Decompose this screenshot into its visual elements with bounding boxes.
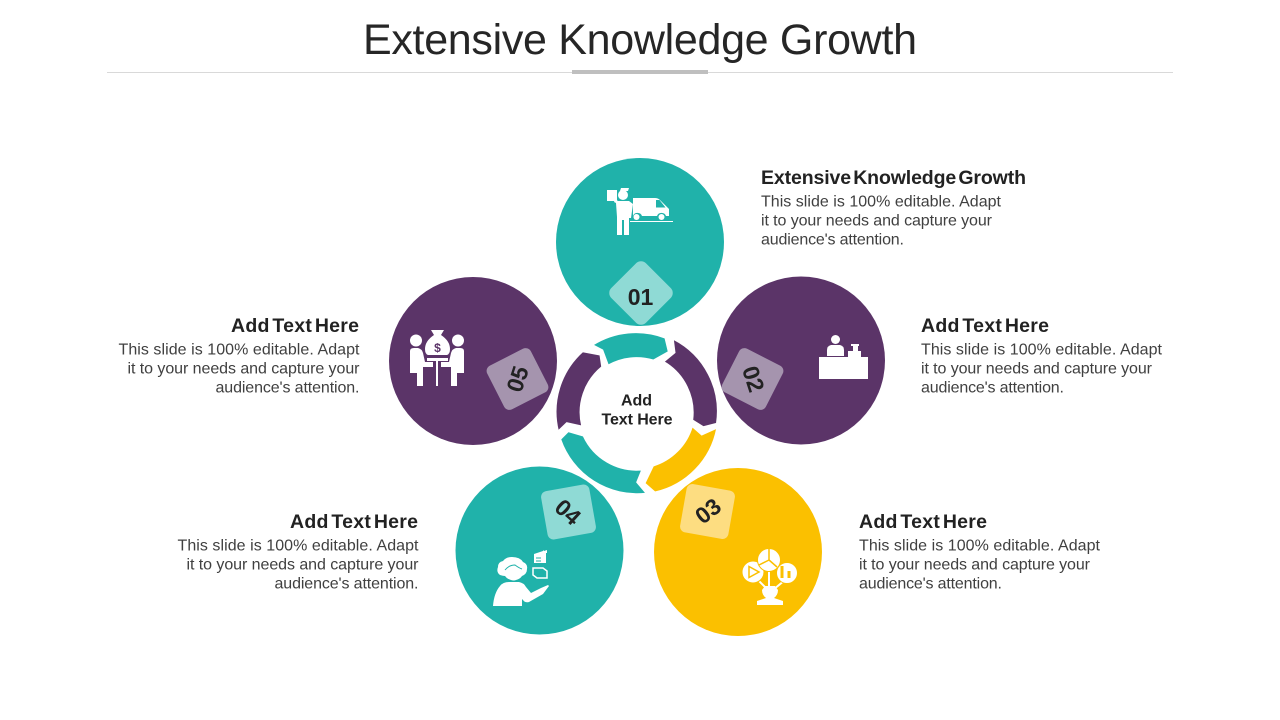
text block: item 01: audience's attention. <box>761 232 904 248</box>
panel: circle 02 purple <box>717 276 885 444</box>
text block: item 04: This slide is 100% editable. Adapt <box>178 538 419 554</box>
panel: circle 04 teal <box>456 466 624 634</box>
panel: circle 01 teal <box>556 158 724 328</box>
text block: item 05 <box>118 315 360 396</box>
central cycle ring <box>556 333 717 494</box>
center label <box>602 392 673 428</box>
text block: item 03: audience's attention. <box>859 576 1002 592</box>
text block: item 05: This slide is 100% editable. Adapt <box>118 342 360 358</box>
text block: item 04: audience's attention. <box>274 576 418 592</box>
text block: item 05: Add Text Here <box>231 315 359 337</box>
text block: item 01 <box>761 167 1026 248</box>
text block: item 02: Add Text Here <box>921 315 1049 337</box>
badge 01: 01 <box>628 284 653 310</box>
text block: item 01: Extensive Knowledge Growth <box>761 167 1026 189</box>
icon: woman with media <box>493 550 549 606</box>
icon: analytics tree <box>742 548 798 605</box>
badge 04: 04 <box>550 494 586 530</box>
title: Extensive Knowledge Growth <box>363 16 917 64</box>
arrow segment: bottom yellow <box>645 427 717 492</box>
panel: circle 05 purple <box>389 277 557 445</box>
text block: item 05: audience's attention. <box>216 380 360 396</box>
badge 02 <box>720 346 785 412</box>
arrow segment: bottom-left teal <box>561 432 646 494</box>
text block: item 02: it to your needs and capture your <box>921 360 1153 378</box>
text block: item 04: Add Text Here <box>290 511 418 533</box>
text block: item 01: This slide is 100% editable. Adapt <box>761 194 1002 210</box>
arrow segment: left purple <box>556 352 602 431</box>
center label: Text Here <box>602 412 673 428</box>
badge 05 <box>485 346 550 412</box>
badge 03 <box>679 483 736 540</box>
text block: item 03: Add Text Here <box>859 511 987 533</box>
badge 01 <box>606 258 676 328</box>
badge 03: 03 <box>690 493 726 529</box>
text block: item 03 <box>859 511 1101 592</box>
text block: item 03: it to your needs and capture your <box>859 556 1091 574</box>
badge 04 <box>540 484 597 540</box>
icon: receptionist at desk <box>819 335 868 379</box>
icon: delivery man and van <box>607 188 673 235</box>
text block: item 05: it to your needs and capture your <box>128 360 360 378</box>
text block: item 02 <box>921 315 1163 396</box>
center label: Add <box>621 392 652 410</box>
panel: circle 03 yellow <box>654 468 822 636</box>
text block: item 02: audience's attention. <box>921 380 1064 396</box>
text block: item 02: This slide is 100% editable. Adapt <box>921 342 1163 358</box>
icon: money bag meeting <box>410 330 464 386</box>
text block: item 04: it to your needs and capture your <box>186 556 419 574</box>
icon: money bag meeting: $ <box>434 341 441 355</box>
text block: item 04 <box>178 511 419 592</box>
badge 05: 05 <box>501 363 534 395</box>
arrow segment: right purple <box>664 339 717 427</box>
text block: item 01: it to your needs and capture your <box>761 212 993 230</box>
badge 02: 02 <box>737 363 770 395</box>
arrow segment: top teal <box>593 333 668 365</box>
text block: item 03: This slide is 100% editable. Adapt <box>859 538 1101 554</box>
